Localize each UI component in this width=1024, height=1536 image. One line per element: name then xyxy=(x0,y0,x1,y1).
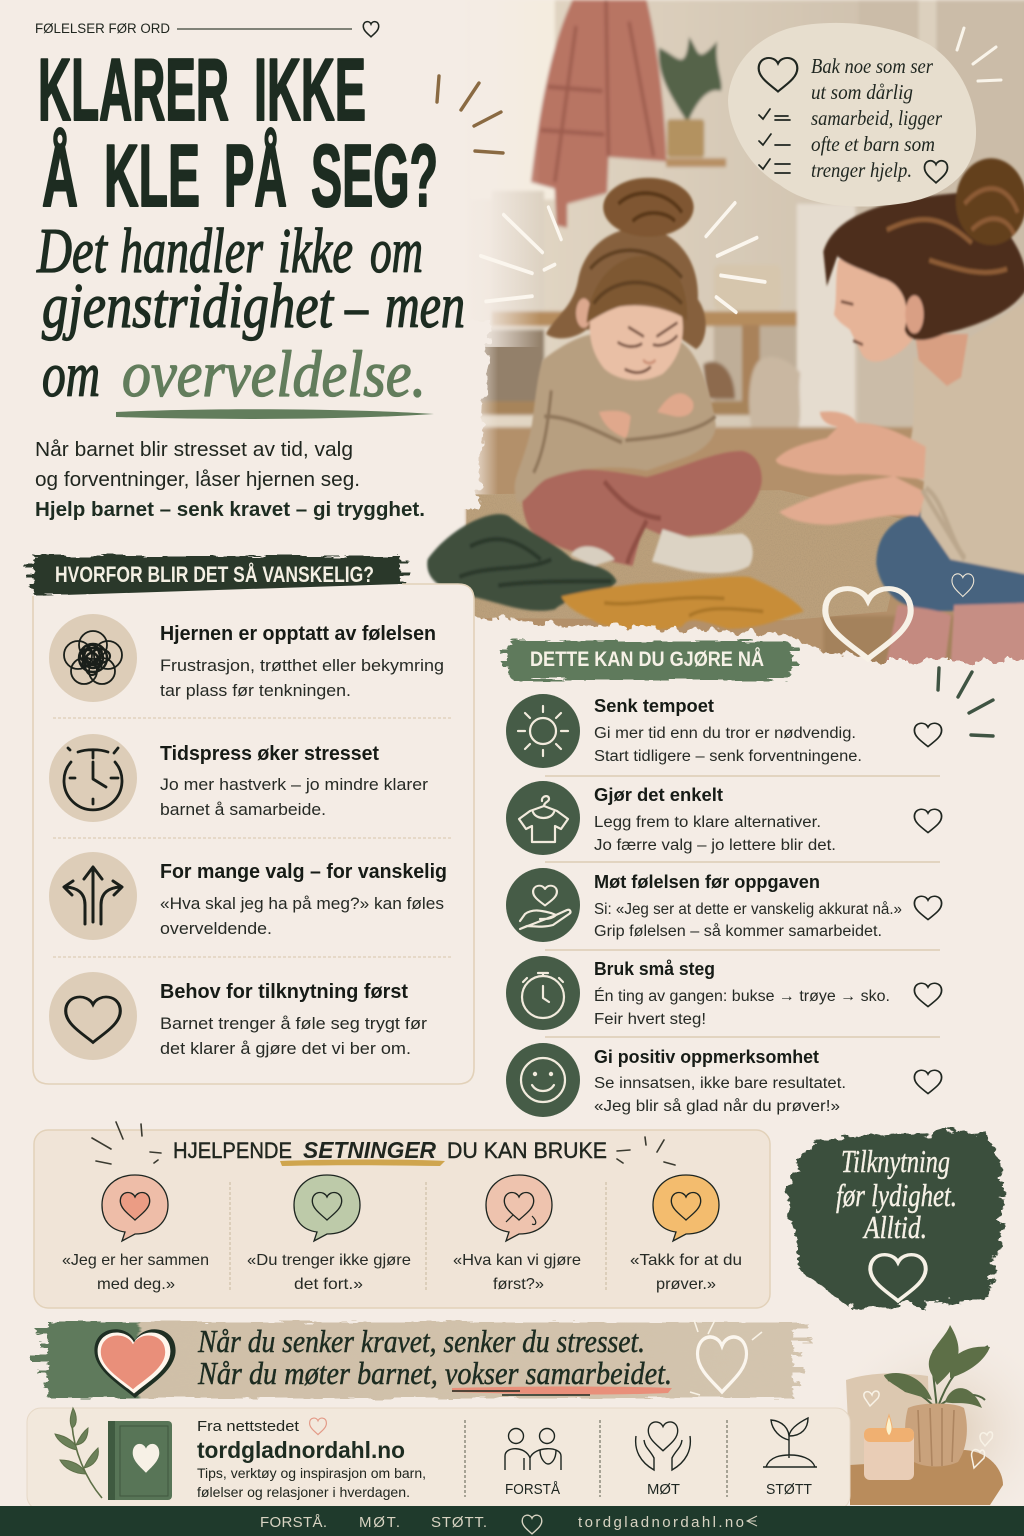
child: face xyxy=(590,306,683,380)
child: sweater xyxy=(515,334,716,502)
icon: møt: MØT xyxy=(647,1481,680,1498)
item: clock: Jo mer hastverk – jo mindre klarer xyxy=(160,775,428,794)
panel: website: følelser og relasjoner i hverdagen. xyxy=(197,1485,410,1500)
item: clock: barnet å samarbeide. xyxy=(160,800,326,819)
rug xyxy=(466,490,908,620)
pink boots xyxy=(885,605,951,668)
title: SEG? xyxy=(311,126,438,225)
floor clothes: yellow xyxy=(561,576,804,630)
hands xyxy=(776,411,926,479)
phrase 2: det fort.» xyxy=(294,1276,363,1293)
item: brain tangle: Frustrasjon, trøtthet eller bekymring xyxy=(160,656,444,675)
action: smiley xyxy=(506,1043,942,1117)
item: clock xyxy=(49,734,428,822)
jeans heart xyxy=(952,574,974,597)
brush callout: connection: Alltid. xyxy=(862,1209,927,1245)
action: t-shirt: Jo færre valg – jo lettere blir det. xyxy=(594,837,836,854)
intro text: og forventninger, låser hjernen seg. xyxy=(35,469,360,491)
footer bar xyxy=(0,1506,1024,1536)
title: KLE xyxy=(104,126,200,225)
icon: heart xyxy=(759,58,797,92)
subtitle: ikke xyxy=(278,216,353,286)
item: three arrows xyxy=(49,852,447,940)
phrase 2 xyxy=(247,1175,411,1293)
phrase 2: «Du trenger ikke gjøre xyxy=(247,1252,411,1269)
section banner: why: HVORFOR BLIR DET SÅ VANSKELIG? xyxy=(55,561,374,587)
action: stopwatch: Bruk små steg xyxy=(594,959,715,979)
action: smiley: Gi positiv oppmerksomhet xyxy=(594,1047,819,1067)
section banner: actions: DETTE KAN DU GJØRE NÅ xyxy=(530,647,764,671)
icon: møt xyxy=(636,1422,690,1498)
phrase 3 xyxy=(453,1175,581,1293)
jeans xyxy=(876,512,1024,612)
quote band: Når du senker kravet, senker du stresset. xyxy=(197,1323,645,1359)
footer bar: STØTT. xyxy=(431,1514,487,1531)
sparkle strokes near title xyxy=(437,76,503,153)
panel: website: Fra nettstedet xyxy=(197,1418,300,1435)
item: heart: Behov for tilknytning først xyxy=(160,981,408,1003)
section banner: actions xyxy=(500,641,800,680)
action: t-shirt: Legg frem to klare alternativer. xyxy=(594,814,821,831)
icon: forstå xyxy=(505,1428,561,1498)
title: IKKE xyxy=(254,40,366,139)
speech bubble: reflection: trenger hjelp. xyxy=(811,158,912,182)
candle xyxy=(864,1428,914,1480)
subtitle: – xyxy=(344,271,368,341)
speech bubble: reflection: ofte et barn som xyxy=(811,132,935,156)
eyebrow label xyxy=(35,21,379,37)
subtitle: gjenstridighet xyxy=(42,271,334,341)
action: heart in hand xyxy=(506,868,942,942)
panel: website: Tips, verktøy og inspirasjon om barn, xyxy=(197,1466,426,1481)
title: Å xyxy=(42,126,78,225)
child: hands xyxy=(599,411,631,438)
phrase 1 xyxy=(62,1175,209,1293)
subtitle: handler xyxy=(120,216,263,286)
footer bar: tordgladnordahl.no xyxy=(578,1514,744,1531)
subtitle: om xyxy=(42,340,100,410)
eyebrow label: FØLELSER FØR ORD xyxy=(35,21,170,36)
photo: child and mother scene xyxy=(420,0,1024,720)
decor: candle and plant corner xyxy=(820,1320,1024,1506)
icon: forstå: FORSTÅ xyxy=(505,1481,560,1498)
basket xyxy=(714,265,781,310)
phrase 1: med deg.» xyxy=(97,1276,175,1293)
intro text: Når barnet blir stresset av tid, valg xyxy=(35,439,353,461)
torn bottom edge xyxy=(420,612,1024,720)
phrases heading: DU KAN BRUKE xyxy=(447,1138,607,1163)
action: sun: Senk tempoet xyxy=(594,696,714,716)
intro text: Hjelp barnet – senk kravet – gi trygghet. xyxy=(35,499,425,521)
phrases heading: HJELPENDE xyxy=(173,1138,292,1163)
left fade xyxy=(456,0,541,347)
footer bar: MØT. xyxy=(359,1514,400,1531)
plant xyxy=(888,1346,988,1410)
subtitle xyxy=(36,216,465,419)
item: three arrows: For mange valg – for vanskelig xyxy=(160,861,447,883)
icon: white heart xyxy=(690,1320,762,1395)
action: heart in hand: Grip følelsen – så kommer samarbeidet. xyxy=(594,923,882,940)
action: sun: Gi mer tid enn du tror er nødvendig. xyxy=(594,725,856,742)
brush callout: connection: før lydighet. xyxy=(836,1177,957,1213)
action: stopwatch xyxy=(506,956,942,1030)
left torn edge xyxy=(440,320,490,508)
icon: branch xyxy=(55,1408,102,1498)
action: t-shirt xyxy=(506,781,942,855)
socks xyxy=(652,529,753,573)
panel: actions xyxy=(506,694,942,1117)
icon: støtt xyxy=(763,1418,817,1498)
brush callout: connection xyxy=(785,1130,1003,1308)
title: PÅ xyxy=(224,126,287,225)
icon: heart xyxy=(870,1255,926,1301)
white energy strokes xyxy=(481,203,765,312)
item: heart: Barnet trenger å føle seg trygt før xyxy=(160,1014,427,1033)
icon: pink heart xyxy=(94,1329,176,1398)
icon: book xyxy=(108,1421,172,1500)
panel: website: tordgladnordahl.no xyxy=(197,1437,405,1463)
title: KLARER xyxy=(38,40,229,139)
title xyxy=(38,40,438,225)
subtitle: Det xyxy=(36,216,108,286)
phrases heading xyxy=(92,1122,675,1166)
item: brain tangle: tar plass før tenkningen. xyxy=(160,681,351,700)
phrase 3: «Hva kan vi gjøre xyxy=(453,1252,581,1269)
action: smiley: Se innsatsen, ikke bare resultatet. xyxy=(594,1075,846,1092)
child: legs xyxy=(522,451,762,566)
action: stopwatch: Feir hvert steg! xyxy=(594,1011,706,1028)
speech bubble: reflection: ut som dårlig xyxy=(811,80,913,104)
action: sun xyxy=(506,694,942,768)
subtitle: overveldelse. xyxy=(122,338,426,411)
plant and pot xyxy=(659,37,722,119)
floor clothes: green xyxy=(427,514,617,611)
item: three arrows: «Hva skal jeg ha på meg?» kan føles xyxy=(160,894,444,913)
speech bubble: reflection xyxy=(728,23,1001,207)
bench xyxy=(477,330,544,403)
subtitle: om xyxy=(370,216,423,286)
action: sun: Start tidligere – senk forventningene. xyxy=(594,748,862,765)
item: brain tangle: Hjernen er opptatt av følelsen xyxy=(160,623,436,645)
action: smiley: «Jeg blir så glad når du prøver!» xyxy=(594,1098,840,1115)
mother hair xyxy=(823,193,1024,340)
icon: støtt: STØTT xyxy=(766,1481,812,1498)
action: stopwatch: Én ting av gangen: bukse → trøye → sko. xyxy=(594,988,890,1005)
section banner: why xyxy=(24,556,410,595)
child: fringe xyxy=(587,256,687,323)
phrase 3: først?» xyxy=(493,1276,544,1293)
item: clock: Tidspress øker stresset xyxy=(160,743,379,765)
intro text xyxy=(35,439,425,521)
action: heart in hand: Si: «Jeg ser at dette er vanskelig akkurat nå.» xyxy=(594,901,902,918)
quote band: Når du møter barnet, vokser samarbeidet. xyxy=(197,1355,672,1391)
item: brain tangle xyxy=(49,614,444,702)
brush callout: connection: Tilknytning xyxy=(841,1143,950,1179)
panel: website xyxy=(27,1408,850,1510)
phrase 4: prøver.» xyxy=(656,1276,716,1293)
phrase 1: «Jeg er her sammen xyxy=(62,1252,209,1269)
phrase 4 xyxy=(630,1175,742,1293)
item: three arrows: overveldende. xyxy=(160,919,272,938)
subtitle: men xyxy=(385,271,465,341)
icon: checklist xyxy=(759,109,790,173)
action: heart in hand: Møt følelsen før oppgaven xyxy=(594,872,820,892)
item: heart xyxy=(49,972,427,1060)
floor xyxy=(466,427,1024,687)
mother sweater xyxy=(896,299,1024,575)
pot xyxy=(905,1404,967,1466)
speech bubble: reflection: samarbeid, ligger xyxy=(811,106,943,130)
footer bar: FORSTÅ. xyxy=(260,1514,327,1531)
sparkle strokes near actions xyxy=(938,668,993,736)
coat xyxy=(531,0,666,228)
phrase 4: «Takk for at du xyxy=(630,1252,742,1269)
phrases heading: SETNINGER xyxy=(303,1137,436,1163)
panel: why it is hard xyxy=(33,584,474,1084)
speech bubble: reflection: Bak noe som ser xyxy=(811,54,934,78)
small hearts xyxy=(864,1391,992,1468)
white heart outline on photo xyxy=(825,589,911,659)
stuffed animal xyxy=(749,357,800,434)
mother neck and face xyxy=(915,334,968,386)
child: hair back xyxy=(546,228,706,349)
panel: helpful phrases xyxy=(34,1122,770,1308)
item: heart: det klarer å gjøre det vi ber om. xyxy=(160,1039,411,1058)
quote band xyxy=(30,1320,812,1398)
action: t-shirt: Gjør det enkelt xyxy=(594,785,723,805)
